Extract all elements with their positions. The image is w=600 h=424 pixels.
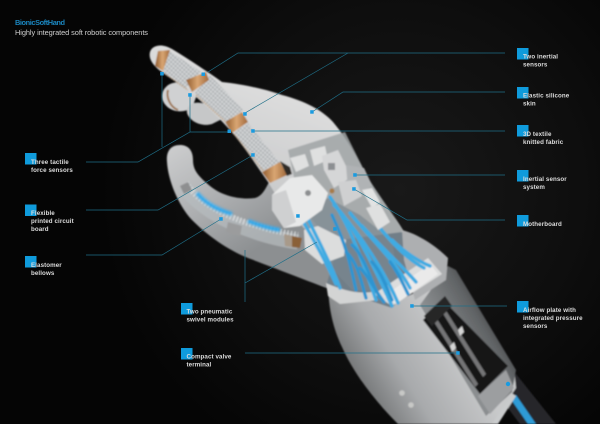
label: 3D textile knitted fabric [517,125,564,146]
forearm far side stripe band [487,374,556,424]
copper band curled fingers [167,90,178,110]
forearm glass cover [420,266,516,416]
label: flexible printed circuit board [25,204,74,233]
label: inertial sensor system [517,170,567,191]
marker dots [160,72,510,386]
white swivel module block [272,175,334,228]
dark tube cavity [300,198,400,292]
label: two inertial sensors: Two inertial [523,54,558,60]
label: elastomer bellows [25,256,62,277]
label: compact valve terminal: Compact valve [186,354,232,360]
label: elastomer bellows: Elastomer [31,262,62,269]
curled middle finger [162,82,198,111]
label: 3D textile knitted fabric: 3D textile [523,131,552,138]
label: compact valve terminal: terminal [186,362,212,368]
label: motherboard [517,215,562,228]
label: three tactile force sensors: force sensors [31,167,73,174]
subtitle: Highly integrated soft robotic components [15,28,148,37]
label: elastic silicone skin: skin [523,100,536,108]
thumb and palm shell [167,145,410,290]
label: two inertial sensors: sensors [523,62,548,68]
label: 3D textile knitted fabric: knitted fabric [523,139,564,146]
electronics window [423,296,514,414]
white palm module [304,226,346,264]
blue pneumatic tubes [303,197,430,306]
label: two inertial sensors [517,48,558,68]
wrist cavity backing [326,232,432,308]
label: three tactile force sensors [25,153,73,174]
label: flexible printed circuit board: board [31,226,49,233]
illustration: bionic hand and forearm [150,45,556,424]
translucent palm interior [288,132,403,262]
label: inertial sensor system: system [523,184,545,191]
wrist cuff [326,230,448,304]
label: airflow plate with integrated pressure sensors: Airflow plate with [523,307,576,314]
label: motherboard: Motherboard [523,221,562,228]
back of hand and index finger shell [150,45,412,270]
copper finger rings [155,50,287,183]
forearm buttons [399,390,414,408]
label: flexible printed circuit board: printed circuit [31,218,74,225]
title: BionicSoftHand [15,18,65,27]
label: airflow plate with integrated pressure sensors: sensors [523,323,548,330]
leader lines [86,53,507,353]
title block [15,18,148,37]
thumb bellows sleeve [184,183,298,242]
label: three tactile force sensors: Three tactile [31,159,69,166]
dark finger joint [280,161,292,176]
label: compact valve terminal [181,348,232,368]
label: flexible printed circuit board: Flexible [31,210,55,217]
label: airflow plate with integrated pressure sensors [517,301,583,330]
thumb copper coupling [180,182,302,248]
label: two pneumatic swivel modules: Two pneumatic [186,308,233,316]
label: inertial sensor system: Inertial sensor [523,176,567,183]
forearm shell [328,272,516,424]
label: two pneumatic swivel modules: swivel modules [186,316,234,324]
label: two pneumatic swivel modules [181,303,234,324]
white tube manifold [374,258,442,306]
curled ring finger [187,103,224,125]
label: elastic silicone skin [517,87,570,108]
label: elastic silicone skin: Elastic silicone [523,92,570,100]
textile finger segments [163,50,280,170]
thumb blue air channel [197,193,280,230]
label: airflow plate with integrated pressure sensors: integrated pressure [523,315,583,322]
finger circuit strip [165,74,264,172]
electronics: inertial sensor board [290,146,390,230]
label: elastomer bellows: bellows [31,270,55,277]
